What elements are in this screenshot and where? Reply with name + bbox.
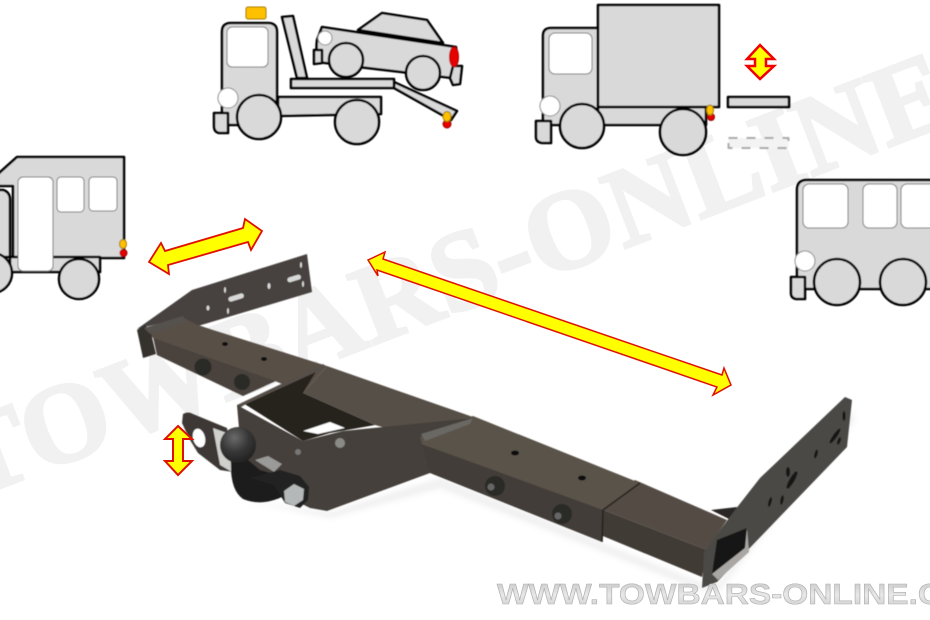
arrow: vehicle width double arrow: [149, 219, 262, 274]
icon: van front view right: [791, 180, 930, 305]
rear lights: [708, 114, 714, 120]
centre box inner: [243, 370, 375, 441]
centre box plate: [237, 405, 473, 511]
amber beacon: [246, 7, 266, 19]
headlight: [540, 96, 560, 116]
centre tube top: [303, 366, 473, 440]
right outer tube top: [400, 416, 640, 510]
headlight: [795, 251, 815, 271]
left mounting plate: [137, 254, 312, 329]
tow ball: [220, 427, 256, 463]
car rear bumper: [450, 66, 462, 85]
ramp lights: [443, 120, 451, 128]
headlight: [218, 88, 238, 108]
van body: [0, 157, 124, 258]
lowered bar dashed: [728, 138, 788, 148]
box rear wall rim: [237, 364, 327, 409]
right gusset: [711, 507, 737, 521]
ball bracket: [250, 470, 309, 508]
wheels: [0, 253, 12, 293]
icon: van rear view left: [0, 157, 127, 299]
label: [213, 428, 232, 472]
car wheels: [329, 43, 363, 77]
right outer tube side: [400, 436, 603, 542]
left plate slots: [206, 262, 304, 314]
icon: box truck with lowered bar: [536, 5, 789, 155]
windows: [57, 177, 84, 212]
door: [18, 177, 53, 271]
hex bolt: [284, 484, 304, 506]
cab: [0, 190, 10, 257]
arrow: towbar width double arrow: [368, 252, 731, 395]
truck wheels: [237, 95, 281, 139]
coupling plate: [182, 412, 233, 472]
left tube holes: [222, 342, 228, 346]
car front bumper: [314, 50, 322, 64]
car body: [316, 27, 456, 78]
left bolts: [194, 358, 250, 390]
right bolts: [485, 476, 572, 524]
right end plate: [702, 397, 852, 588]
sleeve edge: [602, 483, 640, 542]
bumper: [536, 121, 551, 143]
inner tube side: [598, 508, 707, 577]
front bumper: [214, 113, 228, 133]
coupling neck: [231, 460, 288, 502]
box opening white gap: [303, 422, 345, 434]
wheels: [560, 104, 604, 148]
cargo box: [598, 5, 719, 107]
ball bracket label: [255, 456, 282, 472]
weld gusset left: [144, 316, 186, 334]
arrow: coupling height double arrow: [165, 426, 192, 475]
deck ramp: [394, 82, 457, 120]
website url: WWW.TOWBARS-ONLINE.C: [497, 579, 930, 611]
car roof: [358, 13, 443, 43]
raised bar: [728, 97, 789, 107]
left tube side: [153, 337, 278, 396]
left end plate: [137, 325, 156, 358]
rear lights: [120, 250, 127, 256]
right weld: [421, 418, 473, 441]
icon: tow truck carrying car: [214, 7, 462, 144]
right tube holes: [511, 450, 519, 456]
bumper: [791, 277, 805, 299]
towbar photo: [137, 254, 855, 590]
left tube top: [146, 318, 327, 393]
cab window: [227, 27, 268, 67]
icon: red up-down arrow: [747, 45, 774, 79]
cab: [222, 23, 277, 125]
chassis: [10, 257, 100, 272]
lifting arm: [282, 16, 307, 78]
cab: [543, 28, 598, 125]
cab window: [549, 33, 592, 74]
right end tube opening: [712, 528, 747, 574]
car tail light: [450, 47, 458, 67]
car headlight: [318, 31, 332, 45]
chassis: [278, 97, 381, 116]
inner tube top: [598, 480, 727, 550]
wheels: [814, 259, 860, 305]
chassis: [598, 107, 706, 125]
plate hole: [191, 427, 207, 449]
soft shadow: [240, 410, 855, 590]
body: [797, 180, 930, 289]
windows: [803, 184, 848, 228]
deck: [291, 79, 394, 88]
right plate slots: [767, 411, 846, 507]
box hole: [335, 438, 345, 448]
